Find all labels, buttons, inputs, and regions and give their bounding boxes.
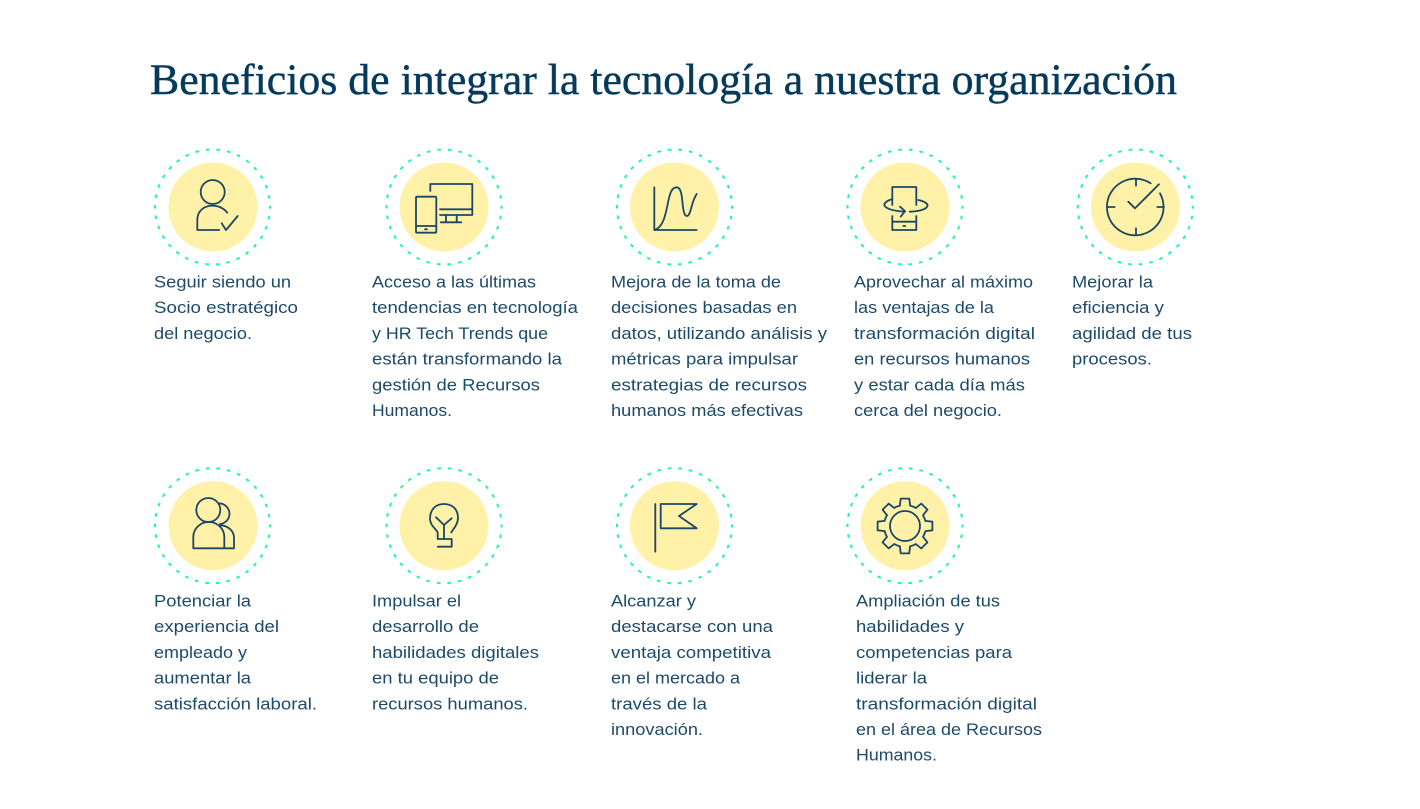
yellow disc xyxy=(630,481,719,570)
text block: las ventajas de la xyxy=(854,298,995,317)
text block: habilidades digitales xyxy=(372,643,539,662)
dashed ring xyxy=(617,150,732,264)
text block: empleado y xyxy=(154,643,248,662)
yellow disc xyxy=(1091,162,1180,252)
text block: y HR Tech Trends que xyxy=(372,324,548,343)
dashed ring xyxy=(386,150,502,264)
text block: transformación digital xyxy=(856,694,1037,713)
text block: habilidades y xyxy=(856,617,965,636)
text block: cerca del negocio. xyxy=(854,401,1002,420)
yellow disc xyxy=(400,481,488,570)
text block xyxy=(372,272,579,420)
text block: agilidad de tus xyxy=(1072,324,1192,343)
card: decisiones basadas en datos xyxy=(611,150,828,420)
card: ventaja competitiva xyxy=(611,468,774,739)
text block: en recursos humanos xyxy=(854,350,1030,369)
text block: ventaja competitiva xyxy=(611,643,772,662)
text block xyxy=(856,591,1042,765)
icon: light bulb xyxy=(430,504,458,547)
yellow disc xyxy=(168,481,258,570)
text block: estrategias de recursos xyxy=(611,375,807,394)
yellow disc xyxy=(860,162,950,252)
icon: monitor and phone xyxy=(416,184,472,233)
icon: rotating phone xyxy=(884,187,927,230)
text block xyxy=(611,591,774,739)
text block: liderar la xyxy=(856,669,928,688)
text block: Aprovechar al máximo xyxy=(854,272,1033,291)
card: transformación digital xyxy=(848,150,1035,420)
text block: Socio estratégico xyxy=(154,298,298,317)
text block xyxy=(854,272,1035,420)
text block: y estar cada día más xyxy=(854,375,1025,394)
icon: gear xyxy=(878,499,932,553)
yellow disc xyxy=(400,162,488,252)
icon: line chart xyxy=(654,187,697,230)
card: habilidades digitales xyxy=(372,468,539,713)
dashed ring xyxy=(848,150,962,264)
dashed ring xyxy=(848,468,962,583)
card: socio estratégico xyxy=(154,150,298,343)
text block: Mejorar la xyxy=(1072,272,1154,291)
text block: innovación. xyxy=(611,720,703,739)
text block: Impulsar el xyxy=(372,591,461,610)
text block: Seguir siendo un xyxy=(154,272,291,291)
card: ampliación de habilidades xyxy=(848,468,1042,765)
text block: en el mercado a xyxy=(611,669,741,688)
text block: satisfacción laboral. xyxy=(154,694,317,713)
text block: tendencias en tecnología xyxy=(372,298,579,317)
text block xyxy=(154,591,317,713)
text block: están transformando la xyxy=(372,350,563,369)
yellow disc xyxy=(630,162,719,252)
icon: two people xyxy=(193,498,234,548)
card: tendencias xyxy=(372,150,579,420)
icon: person with check xyxy=(197,180,238,230)
icon: clock with check xyxy=(1107,179,1164,235)
icon: flag xyxy=(655,504,697,552)
text block: procesos. xyxy=(1072,350,1152,369)
text block xyxy=(1072,272,1192,368)
title: Beneficios de integrar la tecnología a nuestra organización xyxy=(150,57,1177,104)
text block: del negocio. xyxy=(154,324,252,343)
text block: Alcanzar y xyxy=(611,591,697,610)
yellow disc xyxy=(860,481,950,570)
text block xyxy=(611,272,828,420)
text block: través de la xyxy=(611,694,708,713)
text block: desarrollo de xyxy=(372,617,479,636)
text block xyxy=(154,272,298,343)
text block: Humanos. xyxy=(372,401,452,420)
text block: aumentar la xyxy=(154,669,252,688)
text block: experiencia del xyxy=(154,617,279,636)
text block: humanos más efectivas xyxy=(611,401,803,420)
yellow disc xyxy=(168,162,258,252)
text block: competencias para xyxy=(856,643,1013,662)
text block: en tu equipo de xyxy=(372,669,499,688)
dashed ring xyxy=(155,468,270,583)
text block: datos, utilizando análisis y xyxy=(611,324,828,343)
card: eficiencia y agilidad xyxy=(1072,150,1193,368)
text block: recursos humanos. xyxy=(372,694,528,713)
text block: gestión de Recursos xyxy=(372,375,540,394)
text block: Acceso a las últimas xyxy=(372,272,536,291)
text block: Humanos. xyxy=(856,746,937,765)
text block: Ampliación de tus xyxy=(856,591,1000,610)
dashed ring xyxy=(155,150,270,264)
text block: Potenciar la xyxy=(154,591,252,610)
text block: métricas para impulsar xyxy=(611,350,798,369)
text block: transformación digital xyxy=(854,324,1035,343)
text block: Mejora de la toma de xyxy=(611,272,781,291)
text block: decisiones basadas en xyxy=(611,298,797,317)
text block: destacarse con una xyxy=(611,617,774,636)
text block: en el área de Recursos xyxy=(856,720,1042,739)
dashed ring xyxy=(1078,150,1193,264)
text block: eficiencia y xyxy=(1072,298,1165,317)
card: experiencia del empleado xyxy=(154,468,317,713)
text block xyxy=(372,591,539,713)
dashed ring xyxy=(617,468,732,583)
dashed ring xyxy=(386,468,502,583)
